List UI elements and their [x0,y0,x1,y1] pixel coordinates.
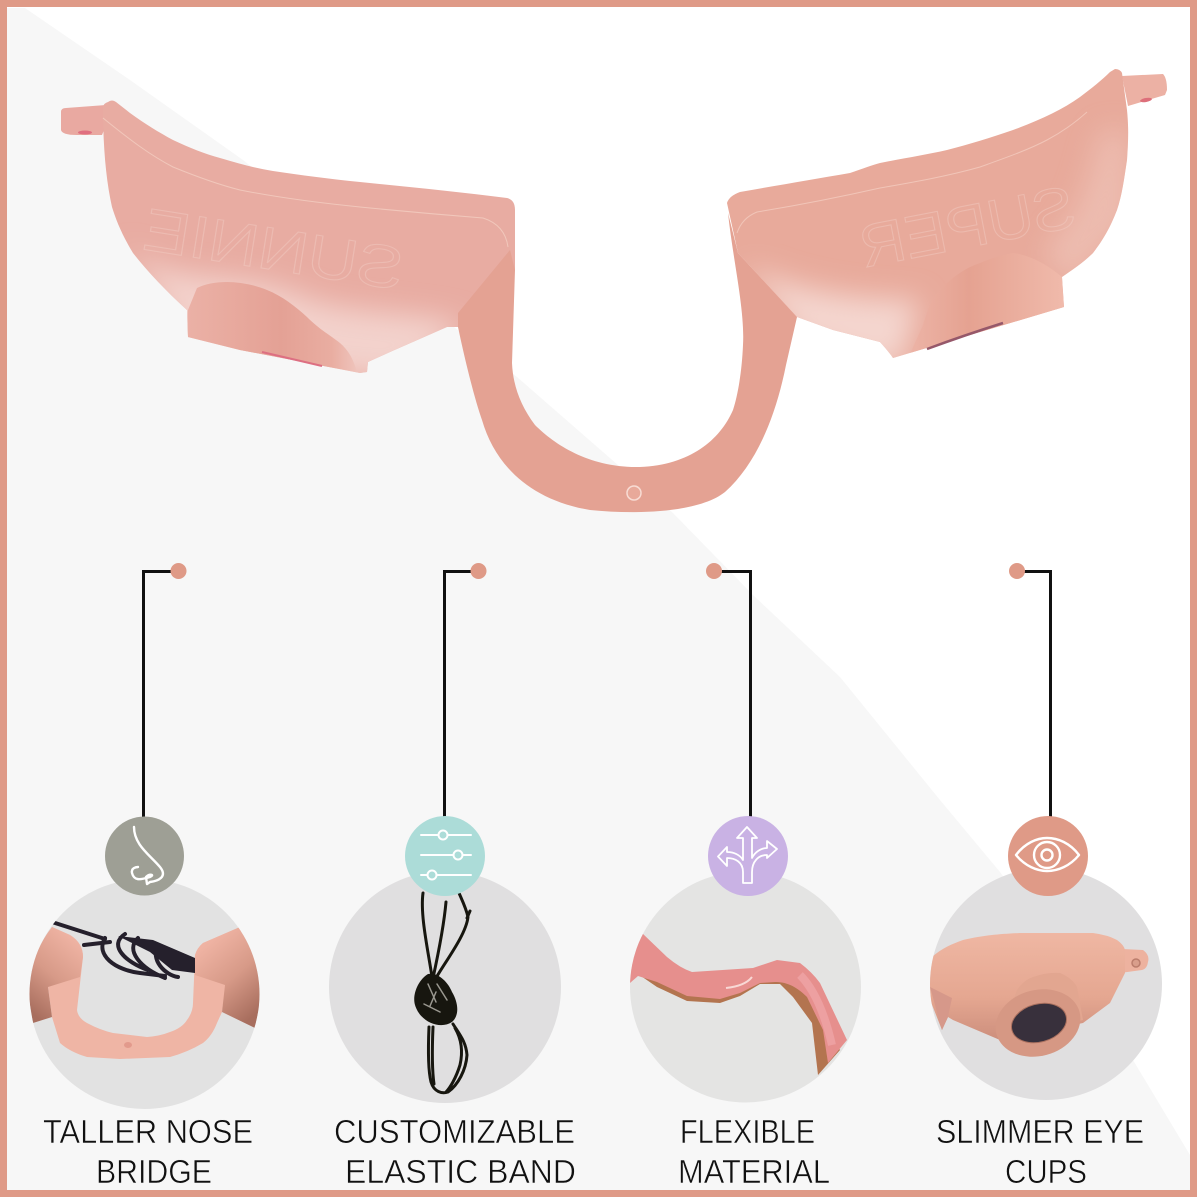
bridge rivet [124,1042,132,1048]
label line 1: FLEXIBLE [680,1113,815,1150]
slider knob 1 [438,830,448,840]
clipped bridge photo [28,922,262,1059]
slider row 2 [421,854,471,856]
left strap tab [61,105,106,135]
right embossed lettering: SUPER [854,173,1080,280]
left cup shading [138,254,458,373]
left shaded wing [28,927,83,1023]
icon: branching arrows [708,816,788,896]
right shaded wing [195,927,262,1028]
strap tab [1124,949,1148,972]
cup shell [925,933,1125,1040]
marker dot 1 [170,563,186,579]
nose outline [132,827,163,884]
clipped bent strap photo [628,933,847,1075]
photo circle: elastic cord [329,871,561,1103]
label line 1: SLIMMER EYE [936,1113,1144,1150]
callout 3: flexible material [628,563,861,1190]
right strap tab [1122,74,1167,106]
leader line 3 [720,572,750,818]
right lens opening [927,323,1003,349]
icon: nose [105,816,184,896]
label 2 [334,1113,576,1190]
label line 2: BRIDGE [96,1153,212,1190]
cup shadow stub [930,987,952,1030]
slider controls [421,830,471,880]
label 1 [43,1113,253,1190]
label line 2: MATERIAL [678,1153,830,1190]
callout 2: customizable elastic band [329,563,576,1190]
leader line 4 [1023,572,1050,818]
eye outline [1016,838,1079,871]
grey disc 4 [930,868,1162,1100]
leader line 2 [444,572,472,818]
right tab hole [1140,97,1152,103]
label line 1: CUSTOMIZABLE [334,1113,575,1150]
right cup body [727,69,1128,358]
strap gloss [726,977,752,988]
left tab hole [78,130,92,134]
icon disc 4 [1008,816,1088,896]
label 4 [936,1113,1144,1190]
knotted elastic cord [414,893,470,1093]
icon: sliders [405,816,485,896]
slider knob 2 [454,850,462,860]
arrows outline [718,827,777,883]
icon: eye [1008,816,1088,896]
strap highlight right [800,975,832,1045]
slider row 3 [421,874,471,876]
upper strands [422,893,470,978]
grey disc 3 [630,872,861,1102]
second strand [84,942,110,945]
right cup shading [745,130,1130,370]
marker dot 3 [706,563,722,579]
clipped eye cup photo [925,933,1148,1040]
lens dome [187,282,357,372]
nose bridge rivet [627,486,641,500]
main strand [52,922,105,939]
grey disc 2 [329,871,561,1103]
knot blob [414,974,457,1025]
photo circle: nose bridge with cord [28,879,262,1109]
leader line 1 [144,572,172,818]
photo circle: bent strap [628,872,861,1102]
right rim line [737,112,1087,233]
callout 4: slimmer eye cups [925,563,1162,1190]
icon disc 1 [105,816,184,896]
lens face [1007,997,1071,1049]
product: sunnies eye protection goggles [61,69,1167,512]
left embossed lettering: SUNNIE [139,196,408,303]
label line 2: ELASTIC BAND [345,1153,576,1190]
label 3 [678,1113,830,1190]
marker dot 2 [470,563,486,579]
elastic cord bundle [52,922,195,978]
pink strap face [628,933,847,1063]
right eye cup [727,69,1167,370]
marker dot 4 [1009,563,1025,579]
slider row 1 [421,834,471,836]
icon disc 3 [708,816,788,896]
bundle body [118,936,195,973]
label line 1: TALLER NOSE [43,1113,253,1150]
left eye cup [61,100,515,380]
lower highlight [754,264,927,358]
right side highlight [1046,131,1128,276]
label line 2: CUPS [1005,1153,1087,1190]
slider knob 3 [428,870,436,880]
loops [102,934,178,978]
iris [1034,842,1060,868]
lens dome [910,265,1064,353]
lower loop [428,1024,467,1093]
nose bridge strap [458,213,797,512]
brown strap edge [638,974,840,1075]
pupil [1042,850,1052,860]
knot gaps [424,984,447,1012]
icon disc 2 [405,816,485,896]
callout 1: taller nose bridge [28,563,262,1190]
grey disc 1 [30,879,260,1109]
lens stalk [1000,973,1083,1040]
left lens opening [262,352,322,366]
photo circle: eye cup [925,868,1162,1100]
lower highlight [138,254,458,373]
pink U bridge [48,927,240,1059]
tab hole [1132,959,1140,967]
arrow shape [718,827,777,883]
left rim line [103,118,508,247]
left cup body [103,100,515,373]
lens barrel [988,980,1088,1066]
